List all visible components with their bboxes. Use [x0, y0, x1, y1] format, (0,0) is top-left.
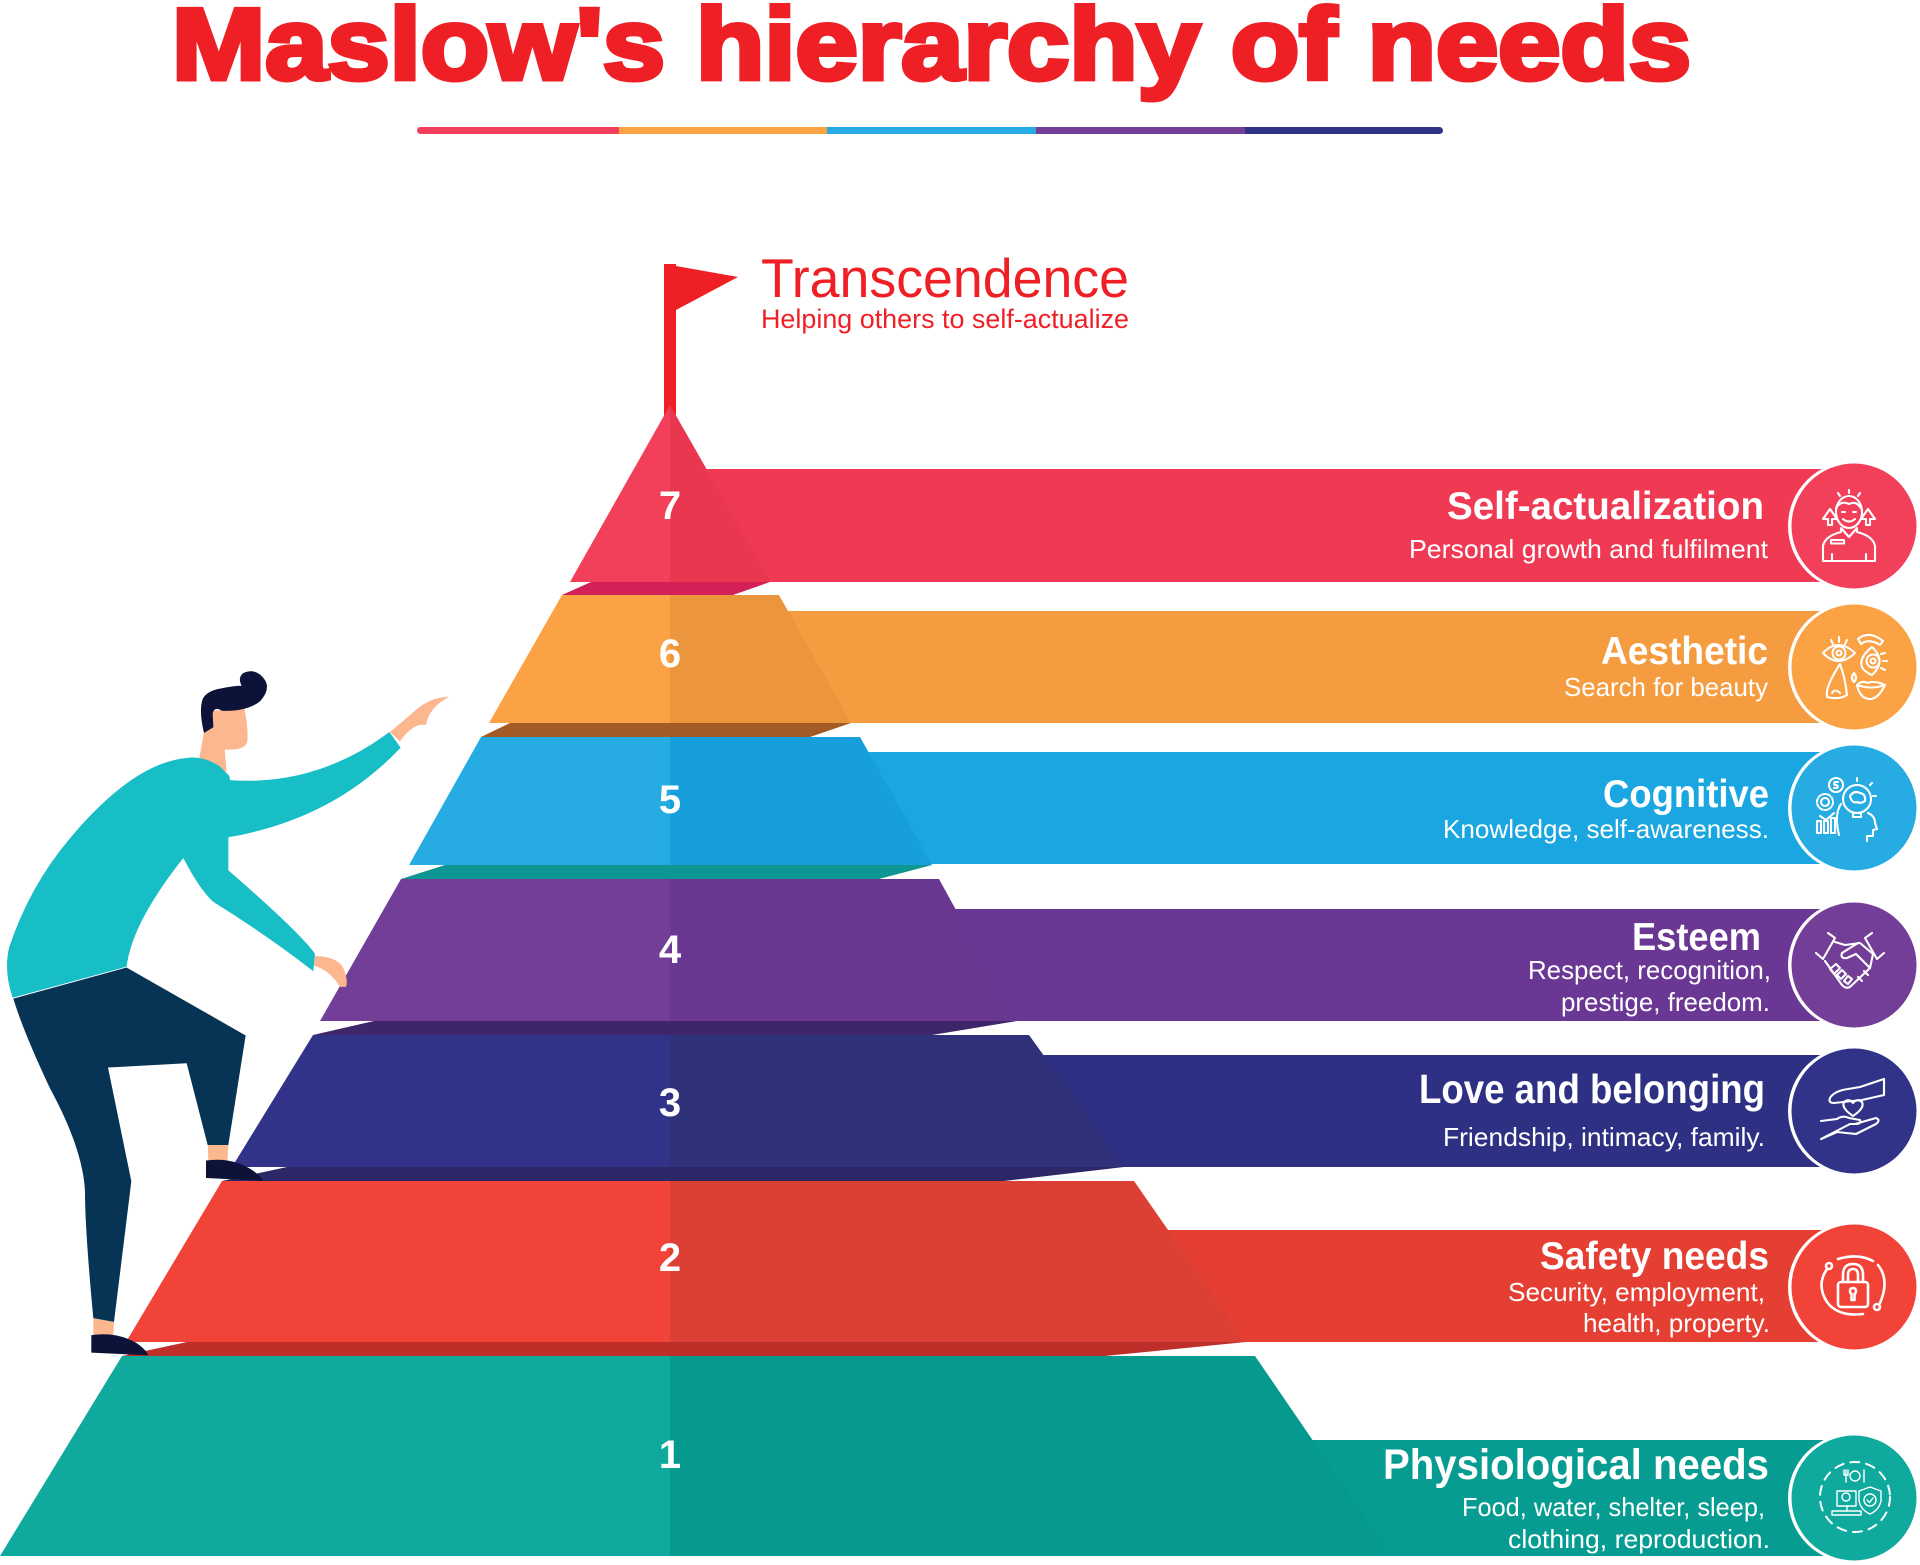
description 1 line 1: Food, water, shelter, sleep, — [1462, 1492, 1765, 1522]
pyramid tier 7 — [562, 405, 771, 595]
level 2: safety needs — [122, 1181, 1918, 1356]
icon badge 2: padlock — [1788, 1222, 1918, 1352]
description 2 line 1: Security, employment, — [1508, 1277, 1765, 1307]
neck and face — [199, 708, 248, 772]
label physiological needs: Physiological needs — [1383, 1441, 1769, 1489]
label love and belonging: Love and belonging — [1419, 1066, 1765, 1112]
band 6 — [670, 611, 1854, 723]
pyramid tier 6 — [481, 595, 851, 737]
icon badge 5: head, gear and chart — [1788, 743, 1918, 873]
number 3: 3 — [659, 1081, 681, 1125]
label esteem: Esteem — [1632, 916, 1761, 959]
pyramid tier 3 — [222, 1035, 1124, 1181]
raised hand — [390, 697, 449, 741]
icon badge 6: eye, nose and lips — [1788, 602, 1918, 732]
title underline: five colour segments — [417, 127, 1443, 134]
upper shoe — [206, 1160, 263, 1181]
description 2 line 2: health, property. — [1583, 1308, 1770, 1338]
description 6: Search for beauty — [1564, 672, 1768, 702]
climbing person — [7, 671, 449, 1355]
number 5: 5 — [659, 778, 681, 822]
level 5: cognitive — [401, 737, 1918, 879]
level 6: aesthetic — [481, 595, 1918, 737]
band 2 — [670, 1230, 1854, 1342]
number 6: 6 — [659, 632, 681, 676]
band 1 — [670, 1440, 1854, 1556]
description 1 line 2: clothing, reproduction. — [1508, 1524, 1770, 1554]
description 5: Knowledge, self-awareness. — [1443, 814, 1769, 844]
icon badge 3: hands and heart — [1788, 1046, 1918, 1176]
pyramid tier 4 — [313, 879, 1017, 1035]
icon badge 1: food, shelter and shield — [1788, 1433, 1918, 1563]
navy trousers — [13, 968, 246, 1322]
icon badge 4: handshake — [1788, 900, 1918, 1030]
label safety needs: Safety needs — [1540, 1235, 1769, 1278]
number 7: 7 — [659, 484, 681, 528]
label cognitive: Cognitive — [1603, 773, 1769, 816]
number 1: 1 — [659, 1433, 681, 1477]
icon badge 7: person with arrows — [1788, 461, 1918, 591]
label aesthetic: Aesthetic — [1601, 630, 1768, 673]
level 1: physiological needs — [0, 1356, 1918, 1563]
description 4 line 2: prestige, freedom. — [1561, 987, 1770, 1017]
description 3: Friendship, intimacy, family. — [1443, 1122, 1765, 1152]
band 7 — [670, 469, 1854, 582]
transcendence description: Helping others to self-actualize — [761, 304, 1129, 334]
band 4 — [670, 909, 1854, 1021]
band 5 — [670, 752, 1854, 864]
hair — [201, 671, 267, 733]
number 4: 4 — [659, 928, 682, 972]
label self-actualization: Self-actualization — [1447, 485, 1764, 528]
level 7: self-actualization — [562, 405, 1918, 595]
description 4 line 1: Respect, recognition, — [1528, 955, 1771, 985]
lower shoe — [91, 1334, 148, 1355]
pyramid tier 5 — [401, 737, 932, 879]
description 7: Personal growth and fulfilment — [1409, 534, 1769, 564]
turquoise sweater — [7, 732, 401, 998]
flag on top of pyramid — [664, 264, 738, 419]
lower hand — [314, 956, 347, 987]
level 4: esteem — [313, 879, 1918, 1035]
pyramid tier 2 — [122, 1181, 1246, 1356]
level 3: love and belonging — [222, 1035, 1918, 1181]
band 3 — [670, 1055, 1854, 1167]
ankles — [93, 1145, 228, 1336]
pyramid tier 1 — [0, 1356, 1392, 1556]
transcendence heading: Transcendence — [761, 247, 1129, 309]
number 2: 2 — [659, 1236, 681, 1280]
